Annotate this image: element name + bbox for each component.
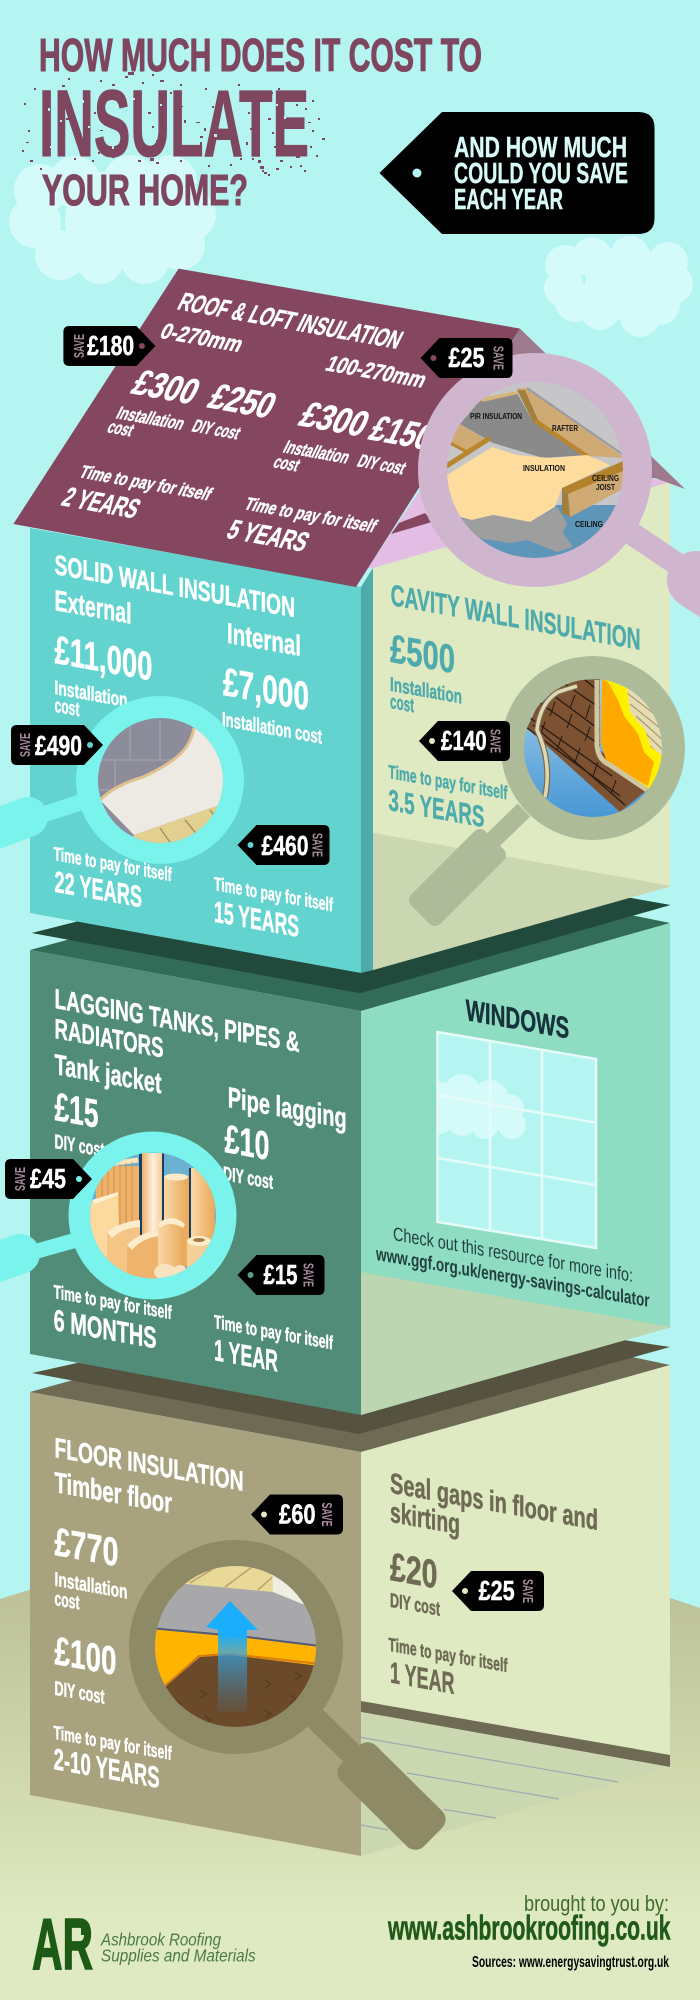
save tag: £60: £60 bbox=[279, 1498, 316, 1530]
save tag: £15: £15 bbox=[264, 1259, 298, 1290]
save tag: £45: SAVE bbox=[12, 1167, 29, 1191]
roof diagram labels: CEILING bbox=[592, 474, 619, 483]
title: INSULATE bbox=[39, 71, 309, 177]
panel: lagging (left wall, middle floor) bbox=[0, 950, 361, 1415]
roof diagram labels: CEILING bbox=[575, 520, 603, 529]
magnifier: cavity wall bbox=[417, 656, 685, 918]
footer: logo bbox=[32, 1905, 256, 1985]
solid wall text: 15 YEARS bbox=[214, 896, 299, 944]
floor insulation text: £100 bbox=[54, 1627, 116, 1684]
lagging text: 1 YEAR bbox=[214, 1334, 278, 1378]
roof text: DIY cost bbox=[354, 451, 409, 478]
solid wall text: £11,000 bbox=[54, 626, 152, 690]
lagging text: 6 MONTHS bbox=[54, 1304, 157, 1355]
save tag: £460: £460 bbox=[262, 830, 308, 861]
cavity wall text: Time to pay for itself bbox=[388, 762, 508, 804]
top divider band bbox=[32, 850, 670, 993]
cloud: right bbox=[544, 236, 693, 337]
magnifier: roof and loft bbox=[418, 353, 700, 622]
magnifier: floor bbox=[129, 1540, 434, 1838]
solid wall text: Time to pay for itself bbox=[214, 874, 333, 916]
save tag: £25 roof: SAVE bbox=[489, 346, 506, 370]
roof text: 5 YEARS bbox=[222, 514, 315, 557]
lagging text: Tank jacket bbox=[54, 1049, 162, 1100]
panel: roof bbox=[13, 269, 700, 622]
resource text: Check out this resource for more info: bbox=[393, 1224, 633, 1287]
roof text: Time to pay for itself bbox=[241, 494, 381, 536]
roof text: DIY cost bbox=[189, 416, 244, 443]
panel: floor insulation (left wall, ground floor) bbox=[30, 1392, 434, 1856]
roof diagram labels: PIR INSULATION bbox=[470, 412, 522, 421]
seal gaps text: skirting bbox=[390, 1497, 460, 1541]
save tag: £140: SAVE bbox=[486, 729, 503, 753]
lagging text: £15 bbox=[54, 1083, 98, 1137]
roof text: £250 bbox=[202, 376, 283, 426]
save tag: £180 bbox=[63, 326, 155, 366]
floor insulation text: 2-10 YEARS bbox=[54, 1743, 160, 1795]
ground bbox=[0, 1490, 700, 2000]
back roof slope bbox=[420, 329, 685, 490]
front roof slope bbox=[13, 269, 520, 587]
solid wall text bbox=[54, 548, 333, 944]
footer: credits bbox=[387, 1891, 671, 1971]
floorboards bbox=[361, 1712, 670, 1856]
gable underside bbox=[368, 478, 670, 568]
lagging text: Pipe lagging bbox=[228, 1082, 347, 1135]
roof text: £150 bbox=[363, 408, 441, 457]
save tag: £45 bbox=[5, 1159, 92, 1199]
seal gaps text bbox=[388, 1468, 598, 1701]
roof text: £300 bbox=[293, 394, 376, 444]
floor insulation text: £770 bbox=[54, 1518, 118, 1575]
roof text: 0-270mm bbox=[156, 319, 248, 357]
seal gaps text: DIY cost bbox=[390, 1590, 440, 1621]
company name: Ashbrook Roofing bbox=[100, 1930, 221, 1950]
save tag: £25 roof bbox=[420, 338, 512, 378]
lagging text bbox=[54, 982, 347, 1378]
seal gaps text: Seal gaps in floor and bbox=[390, 1468, 598, 1537]
solid wall text: 22 YEARS bbox=[54, 866, 142, 914]
seal gaps text: £20 bbox=[390, 1543, 438, 1597]
save tag: £460 bbox=[238, 825, 330, 865]
seal gaps text: Time to pay for itself bbox=[388, 1635, 508, 1677]
panel: seal gaps (right wall, ground floor) bbox=[361, 1365, 670, 1856]
save tag: £140 bbox=[419, 721, 510, 761]
company name bbox=[100, 1930, 256, 1966]
save tag: £25 seal gaps bbox=[452, 1571, 544, 1611]
solid wall text: SOLID WALL INSULATION bbox=[54, 548, 295, 623]
save tag: £25 seal gaps: SAVE bbox=[519, 1579, 536, 1603]
save tag: £180: SAVE bbox=[71, 334, 88, 358]
floor insulation text bbox=[54, 1431, 243, 1795]
callout tag: and how much could you save: EACH YEAR bbox=[454, 184, 563, 216]
lagging text: DIY cost bbox=[223, 1163, 273, 1194]
roof text: cost bbox=[270, 452, 303, 475]
cavity wall text: cost bbox=[390, 691, 414, 717]
lagging text: Time to pay for itself bbox=[214, 1312, 333, 1354]
floor insulation text: Installation bbox=[54, 1569, 128, 1604]
save tag: £15: SAVE bbox=[300, 1263, 316, 1287]
skirting board bbox=[361, 1701, 670, 1767]
cavity wall text bbox=[388, 579, 641, 834]
roof text: £300 bbox=[126, 362, 207, 412]
cavity wall text: Installation bbox=[390, 674, 462, 709]
solid wall text: Installation cost bbox=[222, 709, 322, 749]
floor insulation text: cost bbox=[54, 1588, 80, 1614]
save tag: £140: £140 bbox=[441, 725, 487, 756]
seal gaps text: 1 YEAR bbox=[390, 1657, 455, 1701]
roof diagram labels: INSULATION bbox=[523, 464, 565, 473]
lagging text: DIY cost bbox=[54, 1131, 105, 1162]
lagging divider band bbox=[30, 850, 670, 1011]
solid wall text: cost bbox=[54, 695, 80, 721]
save tag: £180: £180 bbox=[87, 330, 134, 361]
save tag: £15 bbox=[238, 1255, 324, 1295]
roof text: ROOF & LOFT INSULATION bbox=[173, 288, 407, 354]
title: HOW MUCH DOES IT COST TO bbox=[39, 29, 482, 81]
save tag: £25 seal gaps: £25 bbox=[479, 1575, 515, 1606]
footer: credits: brought to you by: bbox=[524, 1891, 669, 1916]
magnifier: pipe lagging bbox=[0, 1132, 236, 1300]
save tag: £490: £490 bbox=[35, 730, 82, 761]
lagging text: £10 bbox=[224, 1115, 270, 1169]
title bbox=[22, 29, 482, 215]
cloud: left bbox=[9, 155, 216, 284]
roof text: 100-270mm bbox=[322, 351, 431, 392]
lagging text: RADIATORS bbox=[54, 1012, 164, 1064]
roof text: Installation bbox=[280, 437, 353, 467]
save tag: £60: SAVE bbox=[318, 1502, 335, 1526]
solid wall text: Internal bbox=[227, 618, 301, 663]
cavity wall text: £500 bbox=[390, 625, 455, 682]
magnifier: solid wall bbox=[0, 696, 244, 864]
roof diagram labels: JOIST bbox=[596, 483, 615, 492]
roof text: 2 YEARS bbox=[57, 482, 146, 524]
panel: cavity wall (right wall, top floor) bbox=[373, 482, 685, 970]
roof text: Time to pay for itself bbox=[76, 462, 216, 504]
windows heading: WINDOWS bbox=[466, 994, 569, 1046]
solid wall text: Time to pay for itself bbox=[54, 844, 172, 886]
solid wall text: Installation bbox=[54, 677, 128, 712]
title: YOUR HOME? bbox=[42, 166, 248, 215]
window graphic bbox=[422, 1032, 596, 1248]
roof diagram labels bbox=[470, 412, 619, 529]
save tag: £490 bbox=[11, 725, 103, 765]
panel: solid wall (left wall, top floor) bbox=[0, 528, 373, 973]
callout tag: and how much could you save bbox=[380, 112, 654, 234]
roof text: Installation bbox=[113, 403, 188, 434]
save tag: £60 bbox=[251, 1494, 343, 1534]
floor insulation text: Timber floor bbox=[54, 1467, 172, 1520]
save tag: £460: SAVE bbox=[308, 833, 326, 857]
lagging text: LAGGING TANKS, PIPES & bbox=[54, 982, 299, 1058]
floor insulation text: Time to pay for itself bbox=[54, 1723, 172, 1765]
roof text bbox=[57, 288, 441, 557]
cavity wall text: 3.5 YEARS bbox=[388, 784, 484, 834]
roof diagram labels: RAFTER bbox=[552, 424, 578, 433]
solid wall text: External bbox=[54, 585, 131, 631]
panel: windows (right wall, middle floor) bbox=[361, 923, 672, 1415]
roof text: cost bbox=[104, 417, 137, 440]
save tag: £490: SAVE bbox=[17, 733, 34, 757]
lagging text: Time to pay for itself bbox=[54, 1282, 172, 1324]
floor insulation text: FLOOR INSULATION bbox=[54, 1431, 243, 1497]
floor insulation text: DIY cost bbox=[54, 1678, 105, 1709]
solid wall text: £7,000 bbox=[223, 658, 309, 719]
save tag: £25 roof: £25 bbox=[448, 342, 484, 373]
callout tag: and how much could you save: AND HOW MUCH bbox=[454, 132, 627, 164]
floor divider band bbox=[30, 1300, 670, 1452]
footer: logo: AR bbox=[32, 1905, 93, 1985]
eave strip bbox=[391, 513, 432, 534]
save tag: £45: £45 bbox=[30, 1163, 66, 1194]
company name: Supplies and Materials bbox=[101, 1946, 256, 1966]
